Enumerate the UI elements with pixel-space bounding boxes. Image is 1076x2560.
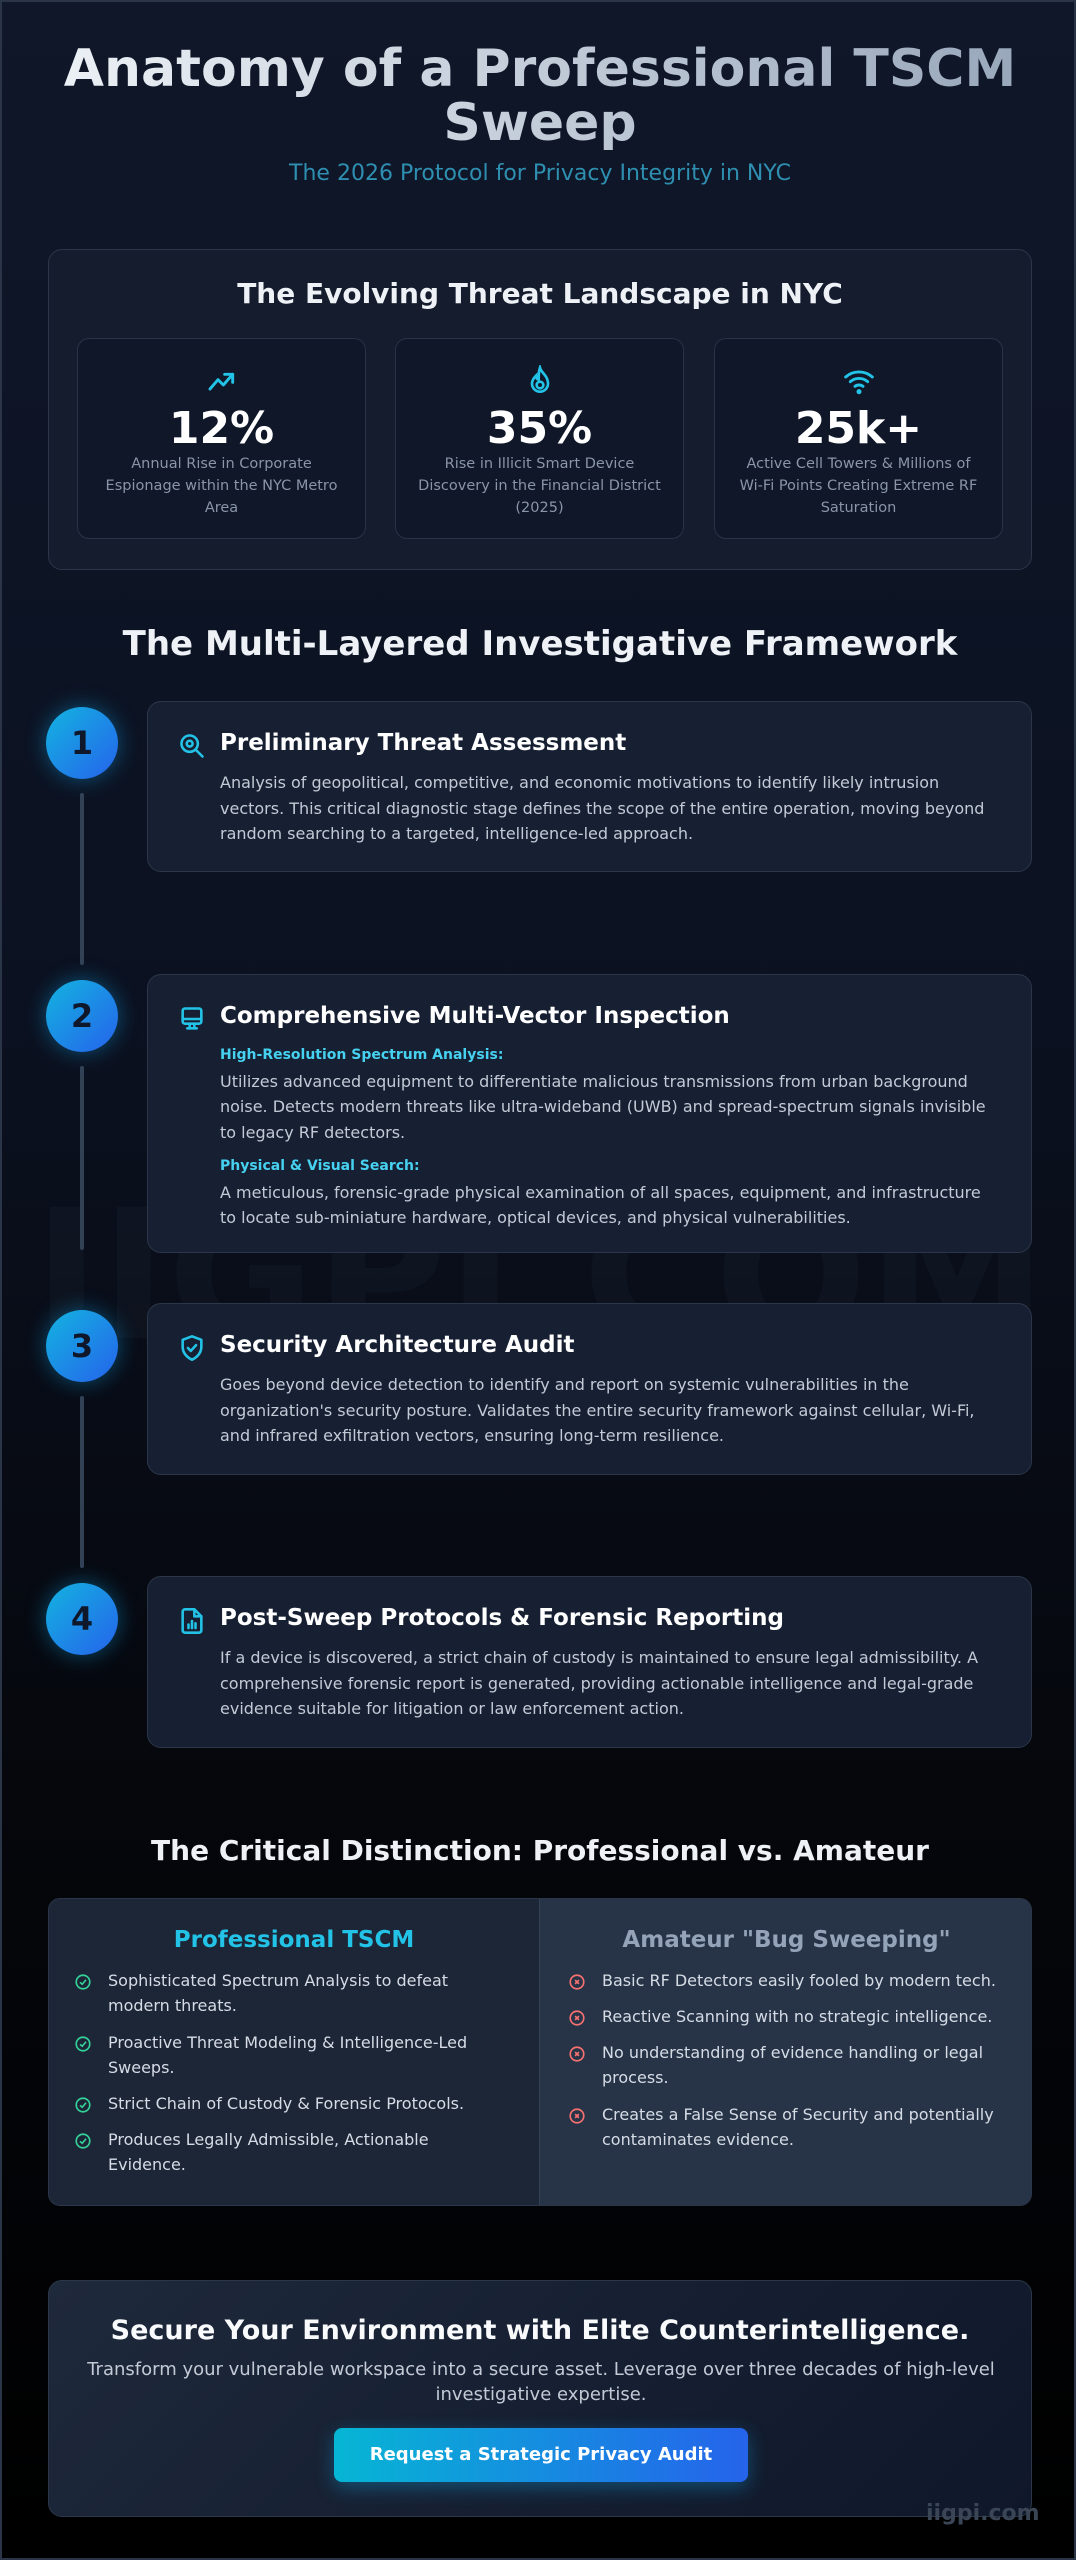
list: professional: Strict Chain of Custody & Forensic Protocols. <box>108 2094 464 2113</box>
list: amateur: Creates a False Sense of Security and potentially contaminates evidence. <box>602 2105 994 2149</box>
heading: framework: The Multi-Layered Investigative Framework <box>123 624 957 664</box>
icon: wifi <box>844 370 874 394</box>
step 4 card <box>147 1576 1032 1748</box>
stat: 25k+: Active Cell Towers & Millions of Wi-Fi Points Creating Extreme RF Saturation <box>740 456 977 516</box>
step 1 number <box>46 707 118 779</box>
stat: 35%: 35% <box>487 403 592 454</box>
step 2 card: Utilizes advanced equipment to differentiate malicious transmissions from urban background noise. Detects modern threats like ultra-wideband (UWB) and spread-spectrum signals invisible to legacy RF detectors. <box>220 1072 986 1142</box>
step 1 card: Analysis of geopolitical, competitive, and economic motivations to identify likely intrusion vectors. This critical diagnostic stage defines the scope of the entire operation, moving beyond random searching to a targeted, intelligence-led approach. <box>220 773 984 843</box>
stat: 12% <box>77 338 366 539</box>
step 1 card: Preliminary Threat Assessment <box>220 730 626 756</box>
step 2 card: Comprehensive Multi-Vector Inspection <box>220 1003 730 1029</box>
heading: comparison: The Critical Distinction: Professional vs. Amateur <box>151 1834 929 1867</box>
list: professional: Produces Legally Admissible, Actionable Evidence. <box>108 2130 429 2174</box>
step 2 number: 2 <box>71 997 93 1035</box>
step 1 number: 1 <box>71 724 93 762</box>
step 2 card: High-Resolution Spectrum Analysis: <box>220 1047 503 1063</box>
CTA button: Request a Strategic Privacy Audit <box>370 2444 712 2465</box>
list: amateur: Basic RF Detectors easily fooled by modern tech. <box>602 1971 996 1990</box>
title <box>2 42 1076 150</box>
stat: 35%: Rise in Illicit Smart Device Discovery in the Financial District (2025) <box>418 456 661 516</box>
stat: 12%: 12% <box>169 403 274 454</box>
CTA text: Transform your vulnerable workspace into a secure asset. Leverage over three decades of high-level investigative expertise. <box>87 2359 995 2405</box>
icon: report <box>181 1608 203 1634</box>
list: amateur: Reactive Scanning with no strategic intelligence. <box>602 2007 992 2026</box>
step 2 card: Physical & Visual Search: <box>220 1158 420 1174</box>
CTA heading: Secure Your Environment with Elite Counterintelligence. <box>111 2315 969 2346</box>
step 3 number <box>46 1310 118 1382</box>
step 4 card: Post-Sweep Protocols & Forensic Reporting <box>220 1605 784 1631</box>
list: amateur: No understanding of evidence handling or legal process. <box>602 2043 983 2087</box>
stat: 12%: Annual Rise in Corporate Espionage within the NYC Metro Area <box>106 456 337 516</box>
stat: 25k+: 25k+ <box>795 403 922 454</box>
step 3 card <box>147 1303 1032 1475</box>
step 2 card: A meticulous, forensic-grade physical examination of all spaces, equipment, and infrastructure to locate sub-miniature hardware, optical devices, and physical vulnerabilities. <box>220 1182 981 1227</box>
step 2 card <box>147 974 1032 1253</box>
column: professional <box>49 1899 540 2207</box>
step 3 number: 3 <box>71 1327 93 1365</box>
step 2 number <box>46 980 118 1052</box>
step 4 card: If a device is discovered, a strict chain of custody is maintained to ensure legal admissibility. A comprehensive forensic report is generated, providing actionable intelligence and legal-grade evidence suitable for litigation or law enforcement action. <box>220 1648 978 1718</box>
step 4 number: 4 <box>71 1600 93 1638</box>
panel: call to action <box>48 2280 1032 2517</box>
step 1 card <box>147 701 1032 872</box>
column: amateur <box>540 1899 1033 2207</box>
subtitle: The 2026 Protocol for Privacy Integrity in NYC <box>289 161 791 186</box>
icon: flame <box>530 365 550 393</box>
list: professional: Sophisticated Spectrum Analysis to defeat modern threats. <box>108 1971 448 2015</box>
CTA button <box>334 2428 748 2482</box>
stat: 35% <box>395 338 684 539</box>
step 3 card: Goes beyond device detection to identify and report on systemic vulnerabilities in the organization's security posture. Validates the entire security framework against cellular, Wi-Fi, and infrared exfiltration vectors, ensuring long-term resilience. <box>220 1375 975 1445</box>
list: professional: Proactive Threat Modeling & Intelligence-Led Sweeps. <box>108 2033 467 2077</box>
icon: trend up <box>208 372 234 390</box>
list: amateur <box>569 1971 996 2149</box>
step 4 number <box>46 1583 118 1655</box>
stat: 25k+ <box>714 338 1003 539</box>
icon: monitor <box>181 1007 203 1030</box>
icon: shield <box>181 1335 203 1361</box>
title: Sweep <box>443 93 637 153</box>
heading: threat landscape: The Evolving Threat Landscape in NYC <box>237 277 843 310</box>
title: Anatomy of a Professional TSCM <box>64 39 1016 99</box>
watermark: IIGPI.COM <box>33 1172 1047 1381</box>
column: professional: Professional TSCM <box>174 1927 414 1953</box>
column: amateur: Amateur "Bug Sweeping" <box>622 1927 951 1953</box>
step 3 card: Security Architecture Audit <box>220 1332 574 1358</box>
list: professional <box>75 1971 467 2174</box>
panel: comparison <box>48 1898 1032 2206</box>
panel: threat landscape <box>48 249 1032 570</box>
icon: search <box>180 734 204 758</box>
footer watermark: iigpi.com <box>926 2501 1040 2526</box>
